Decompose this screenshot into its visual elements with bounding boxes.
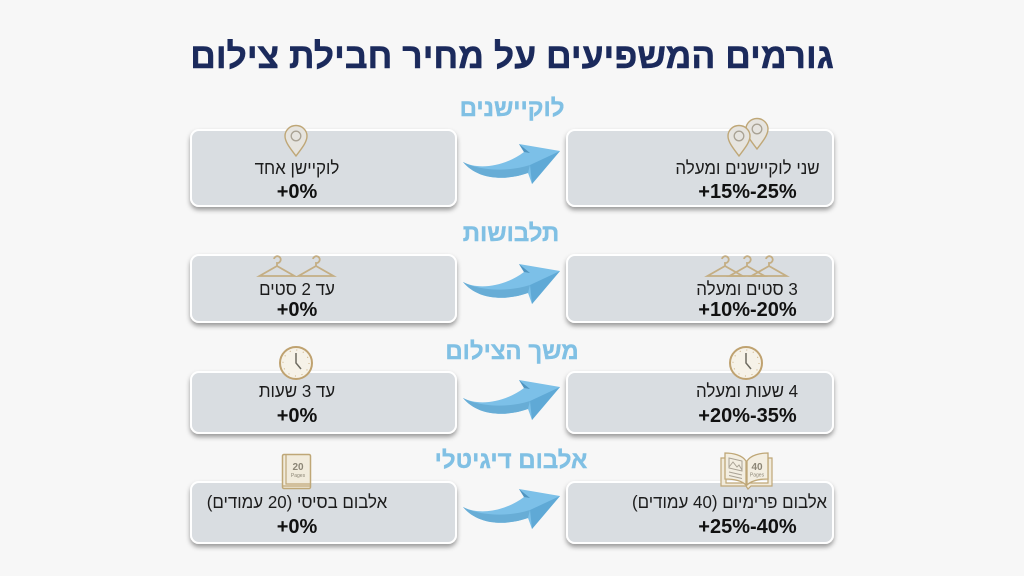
arrow: outfits [463,264,560,304]
icon: 20 page book [282,454,310,488]
label: up to two sets: עד 2 סטים [259,279,335,299]
icon: 20 page book: 20 [292,462,304,473]
price: four or more hours: +20%-35% [698,405,797,427]
icon: map pin [285,126,307,156]
icon: two map pins [728,118,768,156]
arrow: digital album [463,489,560,529]
icon: 40 page open book: Pages [750,472,765,478]
panel: one location [191,126,456,206]
arrow: locations [463,144,560,184]
label: premium album: אלבום פרימיום (40 עמודים) [632,492,827,512]
label: basic album: אלבום בסיסי (20 עמודים) [207,492,387,512]
icon: clock [730,347,762,379]
panel: four or more hours [567,347,833,433]
icon: three hangers [708,256,786,276]
panel: two or more locations [567,118,833,206]
icon: clock [280,347,312,379]
label: four or more hours: 4 שעות ומעלה [696,381,798,401]
section heading: digital album: אלבום דיגיטלי [435,447,587,474]
label: two or more locations: שני לוקיישנים ומעלה [675,158,820,178]
title: גורמים המשפיעים על מחיר חבילת צילום [190,36,834,76]
label: three or more sets: 3 סטים ומעלה [696,279,798,299]
label: up to three hours: עד 3 שעות [259,381,335,401]
price: one location: +0% [277,181,318,203]
section heading: shoot duration: משך הצילום [445,338,579,365]
panel: three or more sets [567,255,833,322]
price: two or more locations: +15%-25% [698,181,797,203]
panel: up to two sets [191,255,456,322]
price: premium album: +25%-40% [698,516,797,538]
label: one location: לוקיישן אחד [255,158,339,178]
icon: 20 page book: Pages [291,473,306,479]
price: up to three hours: +0% [277,405,318,427]
icon: 40 page open book: 40 [751,462,763,473]
icon: 40 page open book [721,453,772,489]
arrow: shoot duration [463,380,560,420]
panel: basic album [191,454,456,543]
price: up to two sets: +0% [277,299,318,321]
price: basic album: +0% [277,516,318,538]
panel: premium album [567,453,833,543]
panel: up to three hours [191,347,456,433]
section heading: outfits: תלבושות [463,220,559,247]
price: three or more sets: +10%-20% [698,299,797,321]
icon: two hangers [260,256,334,276]
section heading: locations: לוקיישנים [460,95,564,122]
